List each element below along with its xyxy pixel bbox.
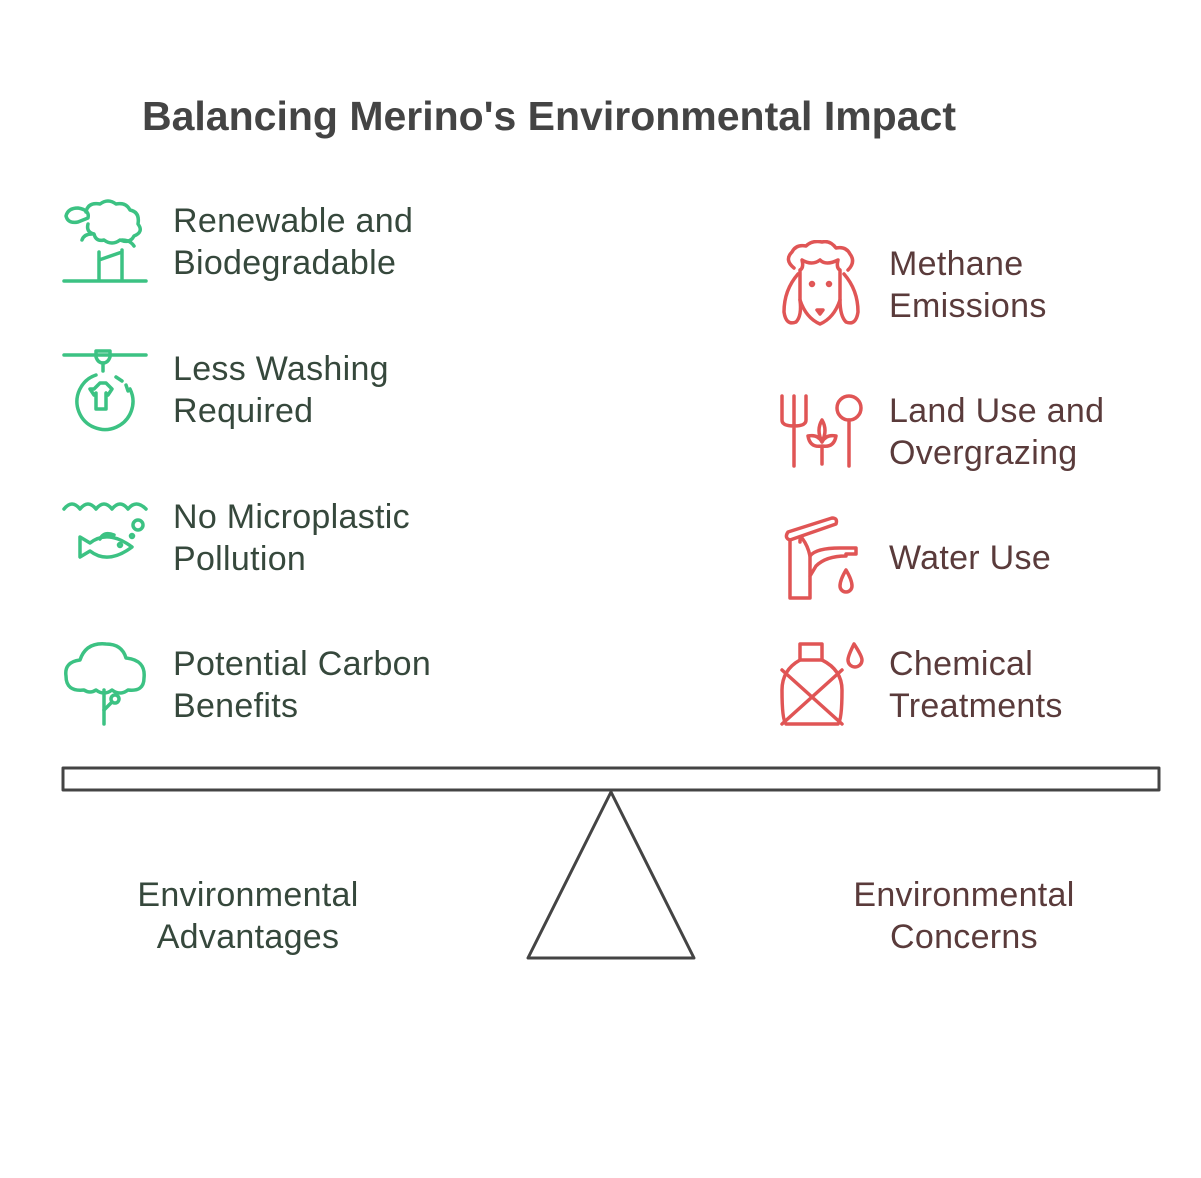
text: methane xyxy=(889,245,1047,325)
text: microplastic: Pollution xyxy=(173,540,306,578)
icon: land use xyxy=(780,394,863,468)
text: land use xyxy=(889,392,1104,472)
text: chemical: Chemical xyxy=(889,645,1033,683)
text: chemical xyxy=(889,645,1063,725)
icon: faucet xyxy=(784,516,858,600)
fulcrum xyxy=(528,792,694,958)
text: land use: Overgrazing xyxy=(889,434,1078,472)
text: chemical: Treatments xyxy=(889,687,1063,725)
text: carbon: Potential Carbon xyxy=(173,645,431,683)
text: less washing: Less Washing xyxy=(173,350,389,388)
label: concerns xyxy=(853,876,1075,956)
text: carbon xyxy=(173,645,431,725)
icon: fish xyxy=(62,502,148,559)
label: advantages: Environmental xyxy=(137,876,359,914)
icon: tree xyxy=(64,642,146,726)
title: Balancing Merino's Environmental Impact xyxy=(142,93,956,139)
text: less washing xyxy=(173,350,389,430)
icon: sheep xyxy=(62,199,148,283)
text: carbon: Benefits xyxy=(173,687,298,725)
icon: chemical bottle xyxy=(780,642,864,726)
icon: washing xyxy=(62,349,148,432)
text: microplastic xyxy=(173,498,410,578)
text: land use: Land Use and xyxy=(889,392,1104,430)
text: methane: Methane xyxy=(889,245,1023,283)
label: advantages xyxy=(137,876,359,956)
text: water use: Water Use xyxy=(889,539,1051,577)
icon: sheep face xyxy=(782,240,860,326)
label: advantages: Advantages xyxy=(157,918,339,956)
text: renewable: Biodegradable xyxy=(173,244,396,282)
label: concerns: Environmental xyxy=(853,876,1075,914)
text: methane: Emissions xyxy=(889,287,1047,325)
label: concerns: Concerns xyxy=(890,918,1038,956)
beam xyxy=(63,768,1159,790)
text: renewable xyxy=(173,202,413,282)
text: less washing: Required xyxy=(173,392,313,430)
text: microplastic: No Microplastic xyxy=(173,498,410,536)
text: renewable: Renewable and xyxy=(173,202,413,240)
